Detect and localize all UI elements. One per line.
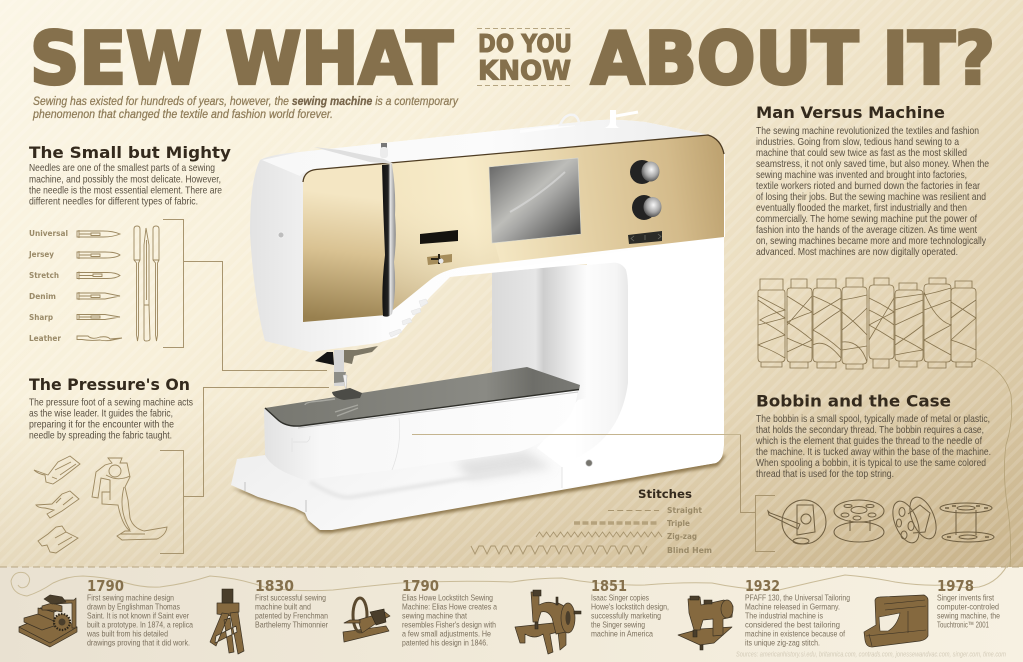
leader lines bbox=[160, 220, 775, 554]
year: 1830 bbox=[255, 577, 294, 595]
sewing machine illustration bbox=[231, 110, 740, 533]
year: 1978 bbox=[937, 577, 974, 595]
body text: advanced. Most machines are now digitally operated. bbox=[756, 247, 958, 258]
needle labels: Leather bbox=[29, 334, 61, 343]
thread line bbox=[976, 358, 1012, 567]
stitch: blind hem: Blind Hem bbox=[667, 546, 712, 555]
side buttons bbox=[389, 299, 428, 337]
needle labels: Denim bbox=[29, 292, 56, 301]
needle labels bbox=[28, 229, 68, 343]
icon: bobbin top view bbox=[834, 500, 884, 542]
description bbox=[255, 593, 328, 630]
description: the Singer sewing bbox=[591, 620, 645, 630]
body text: thread that is used for the top string. bbox=[756, 469, 894, 480]
body text: The pressure foot of a sewing machine acts bbox=[29, 398, 193, 409]
body text: different needles for different types of fabric. bbox=[29, 196, 198, 208]
description: The industrial machine is bbox=[745, 611, 823, 621]
title: DO YOU bbox=[478, 29, 572, 58]
description: drawings proving that it did work. bbox=[87, 638, 190, 648]
icon: pfaff machine bbox=[678, 596, 733, 650]
description bbox=[591, 593, 669, 639]
needles: horizontal bbox=[77, 230, 122, 341]
icon: bobbin spindle bbox=[940, 503, 994, 542]
description bbox=[86, 593, 193, 648]
body text: the needle is the most essential element. There are bbox=[29, 186, 222, 196]
timeline: 1851 singer bbox=[515, 577, 669, 654]
timeline band bbox=[0, 560, 1023, 662]
timeline: 1830 thimonnier bbox=[210, 577, 328, 654]
description: Singer invents first bbox=[937, 593, 995, 603]
description: patented by Frenchman bbox=[255, 611, 328, 621]
description: patented his design in 1846. bbox=[402, 638, 488, 648]
body text: sewing machine was invented and brought into factories, bbox=[756, 170, 967, 181]
description: computer-controled bbox=[937, 602, 999, 612]
description: machine built and bbox=[255, 602, 311, 612]
body text: eventually flooded the market, first industrially and then bbox=[756, 203, 967, 214]
description: drawn by Englishman Thomas bbox=[87, 602, 180, 612]
title: ABOUT IT? bbox=[591, 16, 995, 100]
heading: The Pressure's On bbox=[29, 375, 190, 394]
timeline: 1932 pfaff bbox=[678, 577, 850, 650]
intro text: phenomenon that changed the textile and fashion world forever. bbox=[32, 107, 333, 121]
description bbox=[402, 593, 497, 648]
machine bed bbox=[264, 367, 580, 480]
needle labels: Jersey bbox=[28, 250, 54, 259]
body text: industries. Going from slow, tedious hand sewing to a bbox=[756, 137, 959, 148]
icon: thimonnier machine bbox=[210, 589, 244, 654]
description: built a prototype. In 1874, a replica bbox=[87, 620, 193, 630]
stitch: triple bbox=[574, 519, 690, 528]
year: 1790 bbox=[87, 577, 124, 595]
body text bbox=[755, 414, 991, 480]
body text: commercially. The home sewing machine put the power of bbox=[756, 214, 977, 225]
title: SEW WHAT bbox=[30, 16, 453, 100]
icon: presser foot large bbox=[92, 458, 167, 540]
stitch: blind hem bbox=[471, 546, 712, 555]
knob top bbox=[630, 160, 660, 184]
panel: the pressure's on bbox=[29, 375, 193, 553]
upper fittings bbox=[314, 147, 394, 164]
needle labels: Universal bbox=[29, 229, 68, 238]
description: was built from his detailed bbox=[86, 629, 168, 639]
description: sewing machine, the bbox=[937, 611, 1000, 621]
icon: howe machine bbox=[343, 598, 390, 642]
description: its unique zig-zag stitch. bbox=[745, 638, 820, 648]
icon: saint machine bbox=[19, 595, 77, 647]
description: machine in existence because of bbox=[745, 629, 846, 639]
title: KNOW bbox=[478, 56, 571, 86]
year: 1851 bbox=[591, 577, 627, 595]
slider bbox=[427, 254, 452, 265]
body text: Needles are one of the smallest parts of a sewing bbox=[29, 163, 215, 174]
timeline: 1790 saint bbox=[19, 577, 193, 648]
body text: needle by spreading the fabric taught. bbox=[29, 430, 172, 442]
machine base bbox=[231, 425, 726, 533]
stitch: zig-zag: Zig-zag bbox=[667, 532, 697, 541]
icon: singer machine bbox=[515, 590, 581, 654]
needle labels: Stretch bbox=[29, 271, 59, 280]
body text: which is the element that guides the thread to the needle of bbox=[755, 436, 982, 447]
body text: as the wise leader. It guides the fabric, bbox=[29, 408, 173, 420]
intro text: Sewing has existed for hundreds of years, however, the sewing machine is a contemporary bbox=[33, 94, 459, 108]
panel: bobbin and the case bbox=[755, 392, 994, 547]
thread slot bbox=[382, 164, 396, 317]
heading: Man Versus Machine bbox=[756, 103, 945, 122]
machine head bbox=[250, 110, 725, 352]
needle labels: Sharp bbox=[29, 313, 54, 322]
button strip bbox=[628, 231, 662, 244]
description: Barthelemy Thimonnier bbox=[255, 620, 328, 630]
side dot bbox=[278, 232, 284, 238]
icon: bobbin case bbox=[768, 500, 826, 544]
bobbin leader bbox=[412, 434, 740, 436]
stitch: straight bbox=[608, 506, 702, 515]
description: Howe's lockstitch design, bbox=[591, 602, 669, 612]
description: Machine: Elias Howe creates a bbox=[402, 602, 497, 612]
description: considered the best tailoring bbox=[745, 620, 840, 630]
icon: bobbin side view bbox=[888, 493, 941, 547]
description: PFAFF 130, the Universal Tailoring bbox=[745, 593, 850, 603]
panel: the small but mighty bbox=[28, 143, 232, 343]
description: a few small adjustments. He bbox=[402, 629, 491, 639]
body text: preparing it for the encounter with the bbox=[29, 420, 174, 430]
description: resembles Fisher's design with bbox=[402, 620, 496, 630]
timeline: 1978 touchtronic bbox=[864, 577, 1000, 647]
description: First sewing machine design bbox=[87, 593, 174, 603]
icon: thread spools bbox=[758, 278, 976, 369]
description: Elias Howe Lockstitch Sewing bbox=[402, 593, 493, 603]
needle and presser foot bbox=[315, 346, 378, 400]
heading: Bobbin and the Case bbox=[756, 392, 951, 411]
body text bbox=[29, 398, 193, 442]
description: Saint. It is not known if Saint ever bbox=[87, 611, 189, 621]
stitch: triple: Triple bbox=[667, 519, 690, 528]
year: 1932 bbox=[745, 577, 780, 595]
description: sewing machine that bbox=[402, 611, 468, 621]
body text: machine, and possibly the most delicate. However, bbox=[29, 174, 221, 186]
machine column and body bbox=[492, 237, 724, 488]
description: Isaac Singer copies bbox=[591, 593, 649, 603]
description: First successful sewing bbox=[255, 593, 326, 603]
screen bbox=[489, 158, 581, 243]
icon: presser feet small bbox=[34, 456, 80, 553]
display slit bbox=[420, 230, 458, 244]
year: 1790 bbox=[402, 577, 439, 595]
knob bottom bbox=[632, 195, 662, 220]
intro text bbox=[32, 94, 459, 121]
stitches legend bbox=[471, 487, 712, 555]
body text bbox=[756, 126, 989, 258]
timeline: 1790 howe bbox=[343, 577, 497, 648]
description: Machine released in Germany. bbox=[745, 602, 840, 612]
body text: machine that could sew twice as fast as the most skilled bbox=[756, 148, 967, 159]
description: Touchtronic™ 2001 bbox=[937, 620, 989, 630]
description bbox=[937, 593, 1000, 630]
stitch: straight: Straight bbox=[667, 506, 702, 515]
legend heading: Stitches bbox=[638, 487, 692, 501]
body text: The sewing machine revolutionized the textiles and fashion bbox=[756, 126, 979, 137]
title bbox=[30, 16, 995, 100]
description bbox=[745, 593, 850, 648]
stitch: zig-zag bbox=[536, 532, 697, 541]
description: successfully marketing bbox=[591, 611, 661, 621]
body text bbox=[29, 163, 222, 208]
body text: fashion into the hands of the average citizen. As time went bbox=[756, 225, 977, 236]
icon: touchtronic machine bbox=[864, 595, 928, 647]
needles: vertical bbox=[134, 226, 159, 341]
description: machine in America bbox=[591, 629, 653, 639]
heading: The Small but Mighty bbox=[29, 143, 232, 162]
panel: man versus machine bbox=[756, 103, 989, 369]
body text: textile workers rioted and burned down the factories in fear bbox=[756, 181, 980, 192]
